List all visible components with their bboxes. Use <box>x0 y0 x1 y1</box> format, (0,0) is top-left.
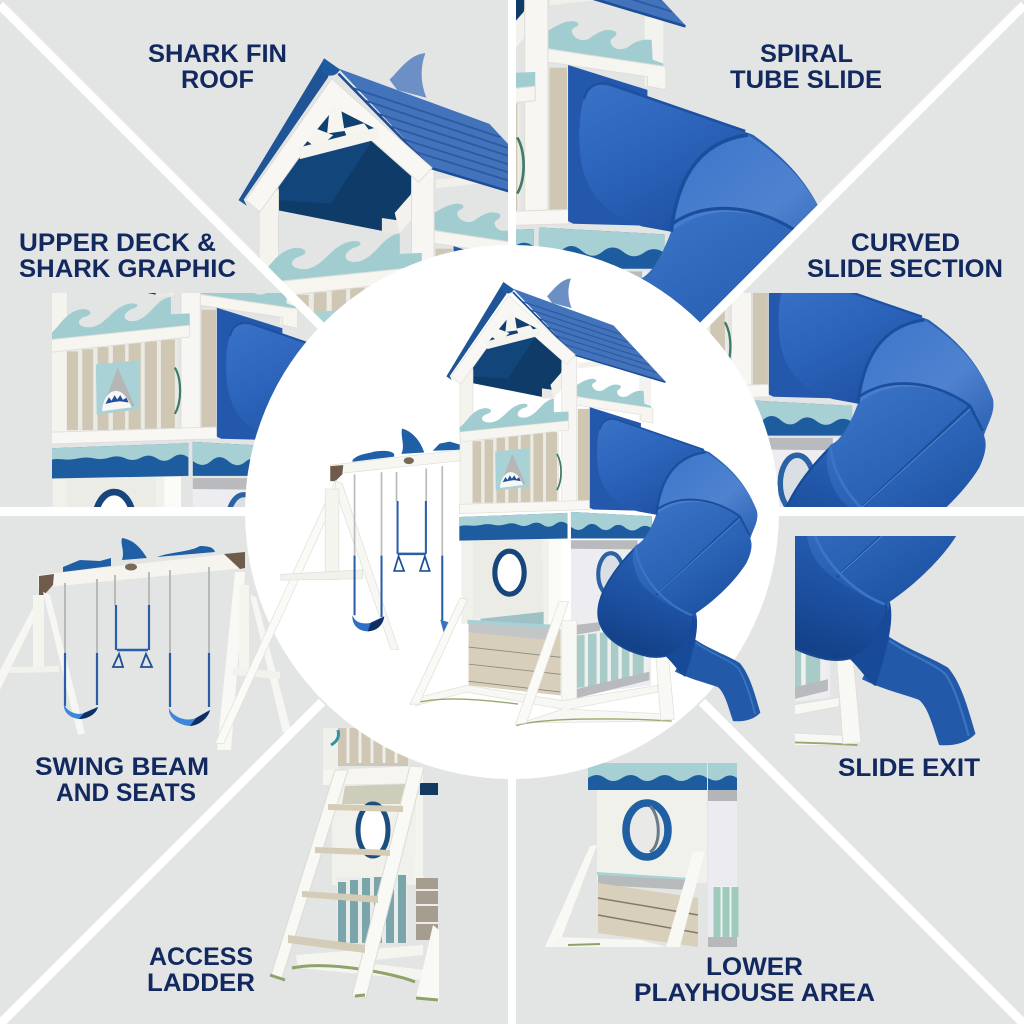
heading: spiral tube slide <box>730 40 882 94</box>
panel: swing beam and seats <box>0 538 291 807</box>
swing set <box>215 429 461 743</box>
heading: upper deck: UPPER DECK & <box>19 229 216 257</box>
heading: lower playhouse area <box>634 953 875 1007</box>
heading: curved slide section: CURVED <box>851 229 960 257</box>
tower with spiral slide <box>410 278 760 726</box>
main illustration: full playset <box>215 278 760 743</box>
heading: access ladder: ACCESS <box>149 943 253 971</box>
heading: curved slide section <box>807 229 1003 283</box>
detail image: upper deck <box>52 293 306 507</box>
heading: lower playhouse area: PLAYHOUSE AREA <box>634 979 875 1007</box>
heading: swing beam <box>35 753 209 807</box>
detail image: roof <box>238 53 508 322</box>
detail image: slide exit <box>795 536 976 746</box>
heading: upper deck: SHARK GRAPHIC <box>19 255 236 283</box>
heading: access ladder <box>147 943 255 997</box>
heading: spiral tube slide: SPIRAL <box>760 40 853 68</box>
heading: swing beam: SWING BEAM <box>35 753 209 781</box>
heading: lower playhouse area: LOWER <box>706 953 803 981</box>
heading: shark fin roof: SHARK FIN <box>148 40 287 68</box>
panel: slide exit <box>795 536 980 776</box>
heading: swing beam: AND SEATS <box>56 779 196 807</box>
heading: curved slide section: SLIDE SECTION <box>807 255 1003 283</box>
central circle <box>245 245 779 779</box>
detail image: swing set <box>0 538 291 750</box>
detail image: curved slide <box>710 293 994 507</box>
panel: access ladder <box>147 728 439 1002</box>
heading: shark fin roof <box>148 40 287 94</box>
detail image: ladder <box>270 728 439 1002</box>
panel: lower playhouse area <box>545 763 875 1007</box>
heading: spiral tube slide: TUBE SLIDE <box>730 66 882 94</box>
heading: upper deck <box>19 229 236 283</box>
detail image: playhouse <box>545 763 737 947</box>
heading: slide exit: SLIDE EXIT <box>838 754 980 782</box>
panel: upper deck and shark graphic <box>20 233 306 507</box>
heading: access ladder: LADDER <box>147 969 255 997</box>
panel: shark fin roof <box>148 44 508 322</box>
panel: spiral tube slide <box>516 0 882 322</box>
detail image: tube slide <box>516 0 818 322</box>
panel: curved slide section <box>710 233 1002 507</box>
heading: shark fin roof: ROOF <box>181 66 254 94</box>
